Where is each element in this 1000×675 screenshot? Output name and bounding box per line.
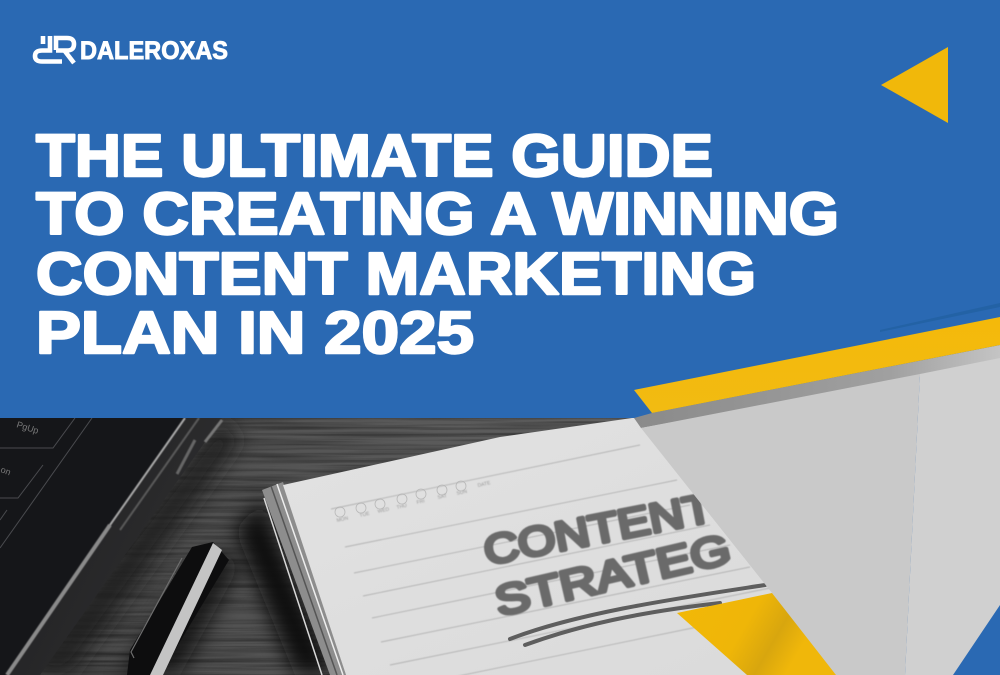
- handwritten words: [484, 494, 731, 616]
- pen highlight stripe: [150, 543, 222, 675]
- logo wordmark: DALEROXAS: [80, 37, 228, 65]
- grey panel shadow: [634, 345, 1000, 428]
- yellow diagonal bar: [634, 317, 1000, 413]
- weekday row: [336, 480, 492, 524]
- weekday row: SUN: [456, 489, 468, 497]
- weekday row: TUE: [359, 511, 371, 519]
- page stack edges: [264, 484, 343, 675]
- desk wood surface: [40, 418, 632, 675]
- handwritten words: STRATEG: [490, 525, 735, 625]
- title: CONTENT MARKETING: [36, 241, 756, 307]
- notebook page: [283, 418, 791, 675]
- logo icon: [35, 36, 74, 63]
- weekday row: SAT: [437, 493, 448, 501]
- blue triangle bottom right: [953, 605, 1000, 675]
- underline strokes: [510, 585, 765, 645]
- weekday row: FRI: [416, 498, 425, 506]
- laptop edge highlights: [7, 418, 222, 675]
- notebook page stack: [262, 482, 346, 675]
- pen body: [127, 542, 229, 675]
- pen shadow: [120, 548, 240, 675]
- yellow triangle lower: [677, 593, 836, 675]
- grey panel: right: [905, 358, 1000, 675]
- ruled lines: [331, 445, 790, 675]
- laptop body: [0, 418, 185, 675]
- laptop side band: [7, 418, 222, 675]
- weekday row: MON: [336, 515, 349, 524]
- title: TO CREATING A WINNING: [36, 181, 839, 247]
- handwritten words: CONTENT: [480, 484, 716, 574]
- weekday row: THU: [396, 503, 408, 511]
- notebook shadow: [235, 500, 335, 675]
- keyboard keys: [0, 418, 92, 548]
- laptop shadow: [20, 418, 240, 675]
- pen: [127, 542, 229, 675]
- keyboard labels: PgUp: [15, 419, 40, 436]
- logo: [35, 36, 228, 65]
- wood grain: [56, 418, 631, 675]
- pen clip: [131, 558, 182, 658]
- grey panel: centre: [641, 374, 920, 675]
- dark blue streak: [880, 303, 1000, 332]
- title: PLAN IN 2025: [36, 300, 474, 366]
- photo: notebook on desk: [0, 418, 850, 675]
- yellow triangle top right: [881, 47, 948, 123]
- keyboard labels: [0, 421, 38, 476]
- title: THE ULTIMATE GUIDE: [36, 123, 713, 189]
- weekday row: WED: [377, 506, 390, 515]
- title: [36, 123, 839, 366]
- day circles: [335, 481, 466, 517]
- weekday row: DATE: [477, 480, 492, 489]
